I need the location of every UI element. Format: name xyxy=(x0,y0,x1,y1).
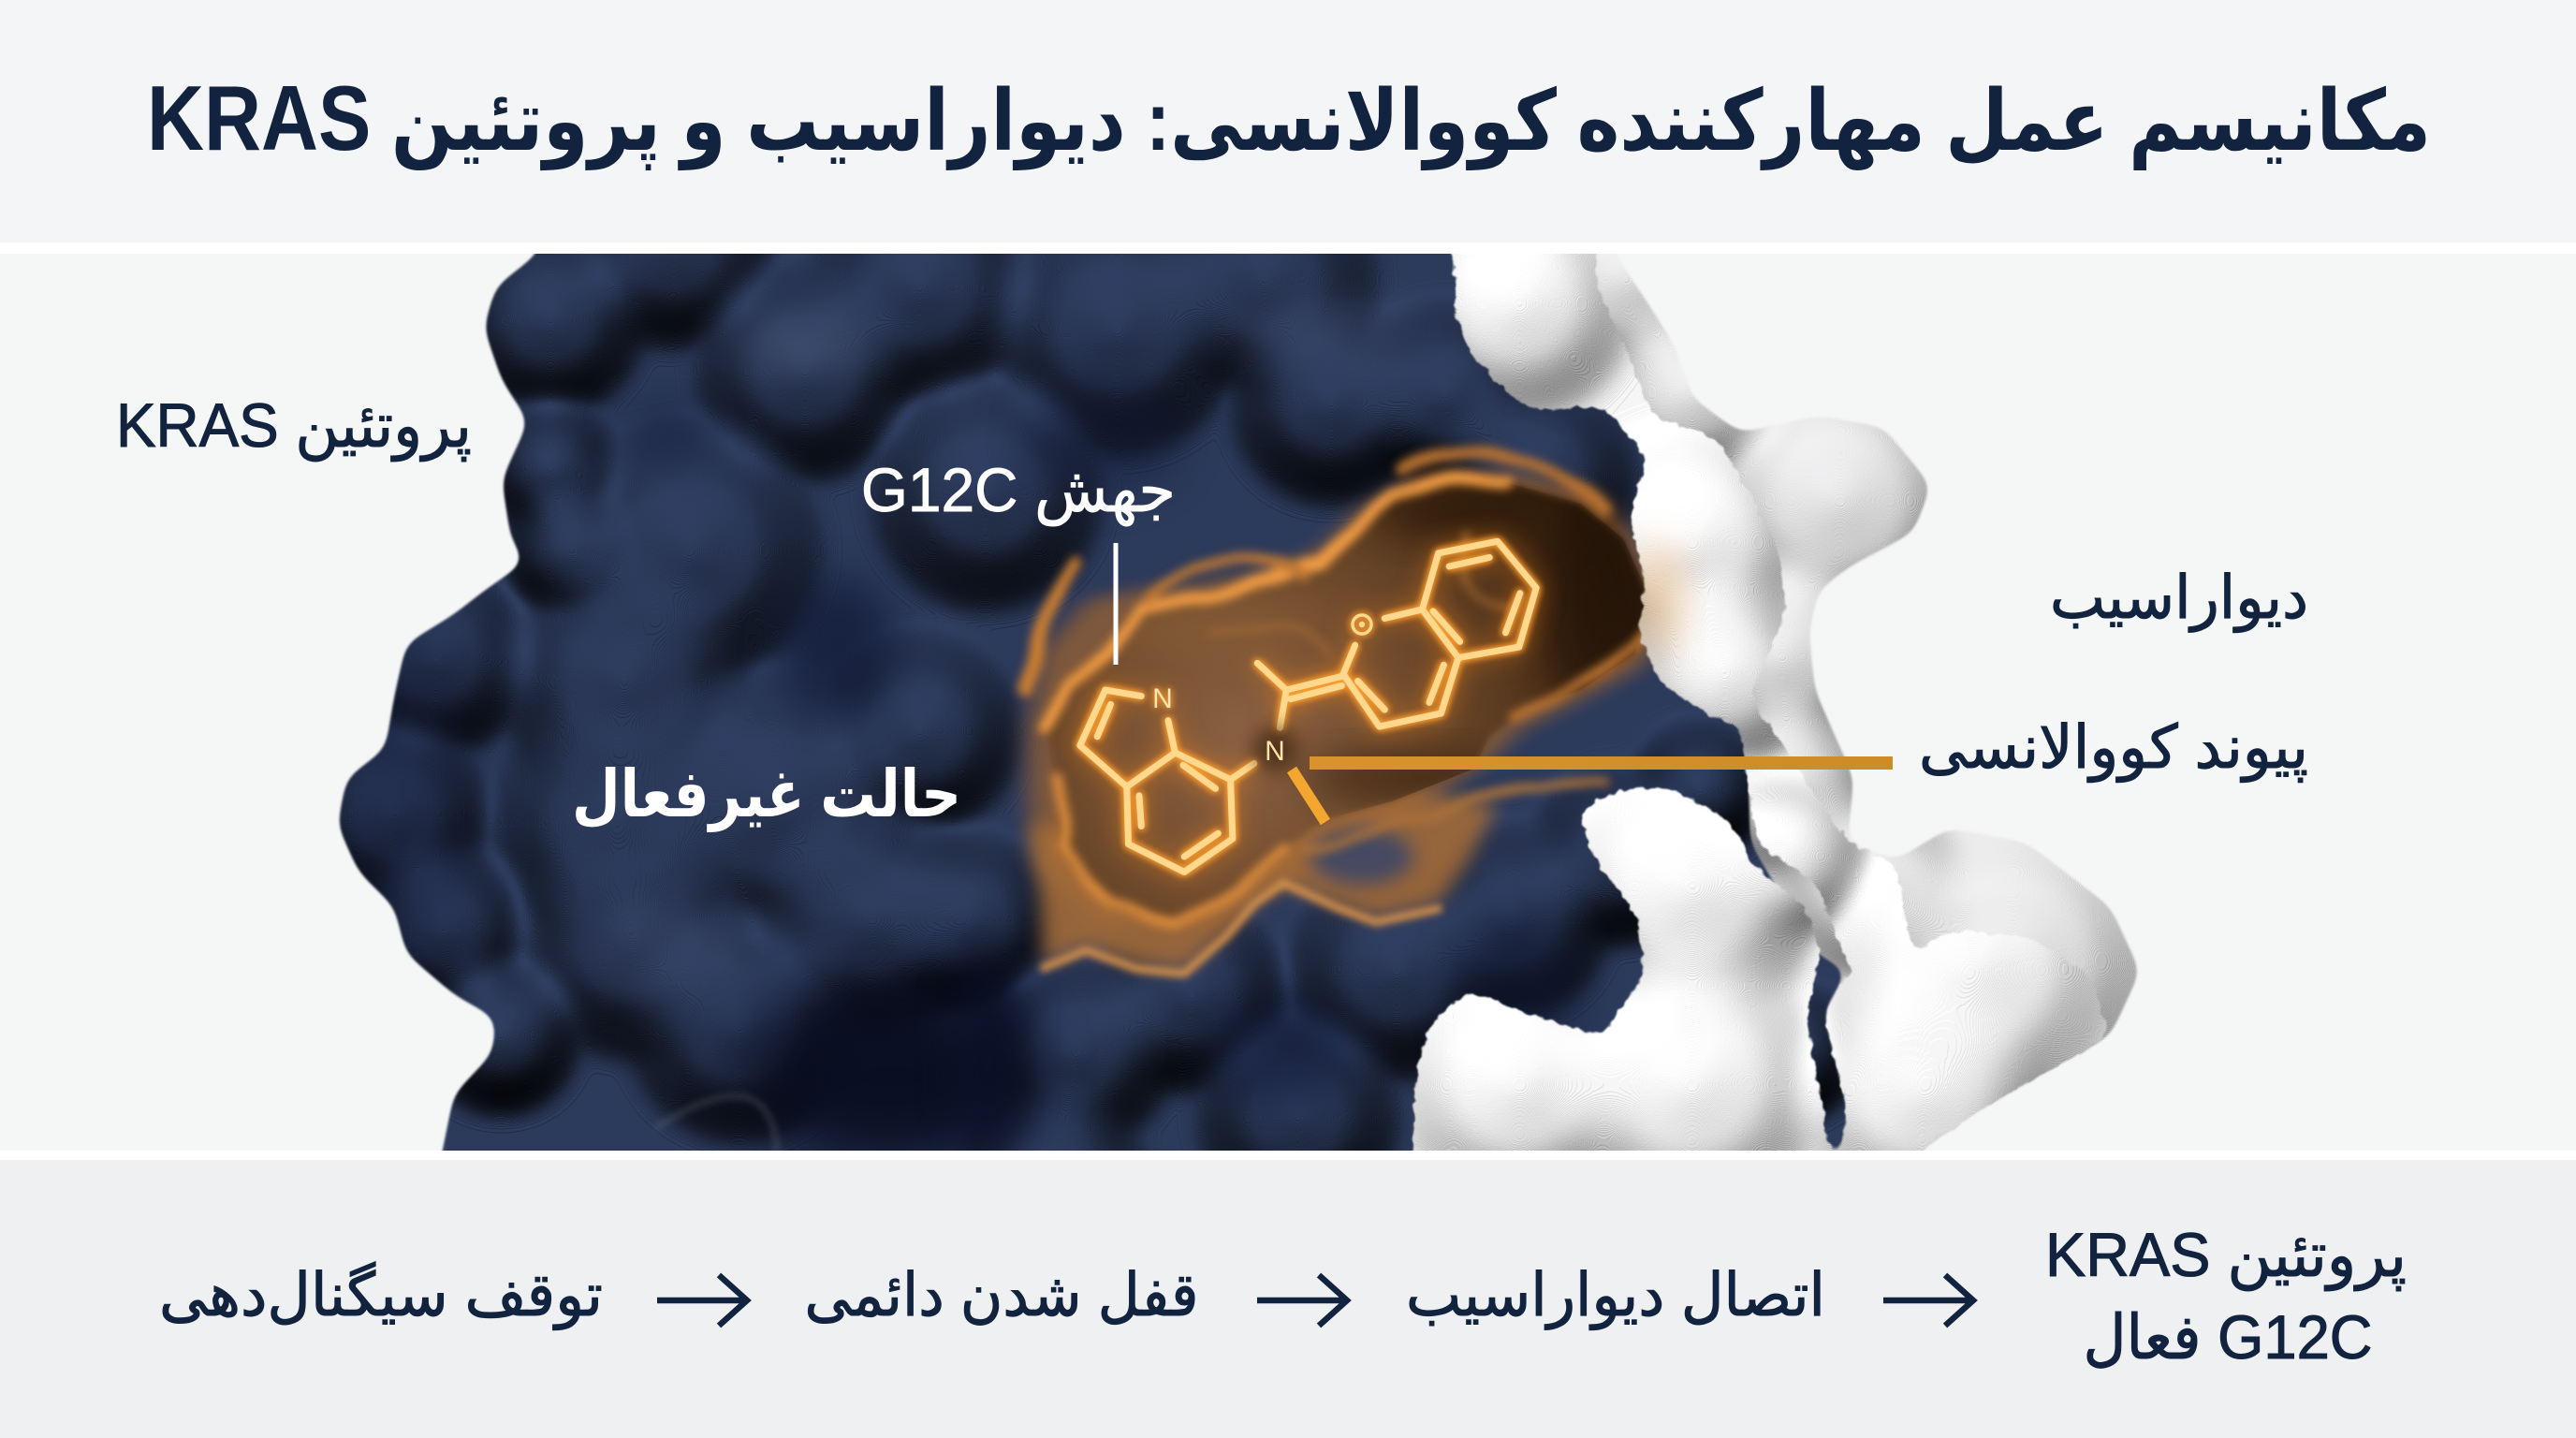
indole five-membered ring xyxy=(1080,690,1175,786)
leader line: divarasib xyxy=(1559,610,2028,616)
dark pits xyxy=(780,577,896,715)
oxygen atom xyxy=(1353,615,1371,634)
crisp lower rim light xyxy=(1041,883,1442,974)
chromene benzene ring xyxy=(1422,541,1536,658)
step: active KRAS G12C: پروتئین KRAS xyxy=(2045,1220,2407,1291)
leader line: mutation xyxy=(1114,543,1118,665)
illustration background xyxy=(0,254,2576,1151)
white surface lobes xyxy=(1388,185,2128,1224)
step: active KRAS G12C xyxy=(2045,1220,2407,1372)
pocket outer glow xyxy=(1028,472,1667,927)
protein surface illustration xyxy=(338,254,2138,1151)
arrow 3 xyxy=(657,1275,747,1326)
arrow 1 xyxy=(1883,1275,1973,1326)
warm glow on white edge xyxy=(1634,543,1679,655)
header band xyxy=(0,0,2576,242)
label: divarasib: دیواراسیب xyxy=(2050,564,2308,633)
molecule: divarasib xyxy=(1080,541,1536,872)
covalent bond stub xyxy=(1292,770,1325,822)
lower orange band xyxy=(1030,786,1498,970)
dark inner shadow of pocket xyxy=(1095,484,1643,800)
nitrogen atom halo xyxy=(1252,726,1297,771)
step: divarasib binding: اتصال دیواراسیب xyxy=(1406,1261,1825,1330)
process flow xyxy=(159,1220,2407,1372)
step: signaling stops: توقف سیگنال‌دهی xyxy=(159,1261,603,1330)
chromene pyran ring xyxy=(1343,609,1458,726)
linker chain xyxy=(1231,663,1344,780)
orange binding pocket xyxy=(1025,452,1667,974)
leader line: covalent bond xyxy=(1310,756,1893,770)
navy lobe inside lower band xyxy=(1310,829,1413,885)
pocket interior xyxy=(1046,478,1650,923)
indole six-membered ring xyxy=(1127,753,1233,872)
step: active KRAS G12C: G12C فعال xyxy=(2084,1302,2372,1372)
white front protein fragments xyxy=(1388,185,2128,1224)
step: permanent lock: قفل شدن دائمی xyxy=(805,1261,1198,1328)
label: covalent bond: پیوند کووالانسی xyxy=(1919,713,2308,783)
navy protein silhouette xyxy=(338,254,1848,1151)
pocket rim and wisps xyxy=(1025,452,1643,923)
nitrogen atom label, indole: N xyxy=(1152,683,1173,714)
navy surface lobes xyxy=(338,254,1848,1151)
label: G12C mutation: جهش G12C xyxy=(861,455,1176,526)
arrow 2 xyxy=(1257,1275,1347,1326)
nitrogen atom label, covalent: N xyxy=(1265,736,1285,767)
soft highlights xyxy=(756,328,857,374)
label: KRAS protein: پروتئین KRAS xyxy=(116,390,472,462)
back grey protein lobes xyxy=(1595,255,2138,1148)
label: inactive state: حالت غیرفعال xyxy=(572,757,961,832)
footer band xyxy=(0,1160,2576,1438)
